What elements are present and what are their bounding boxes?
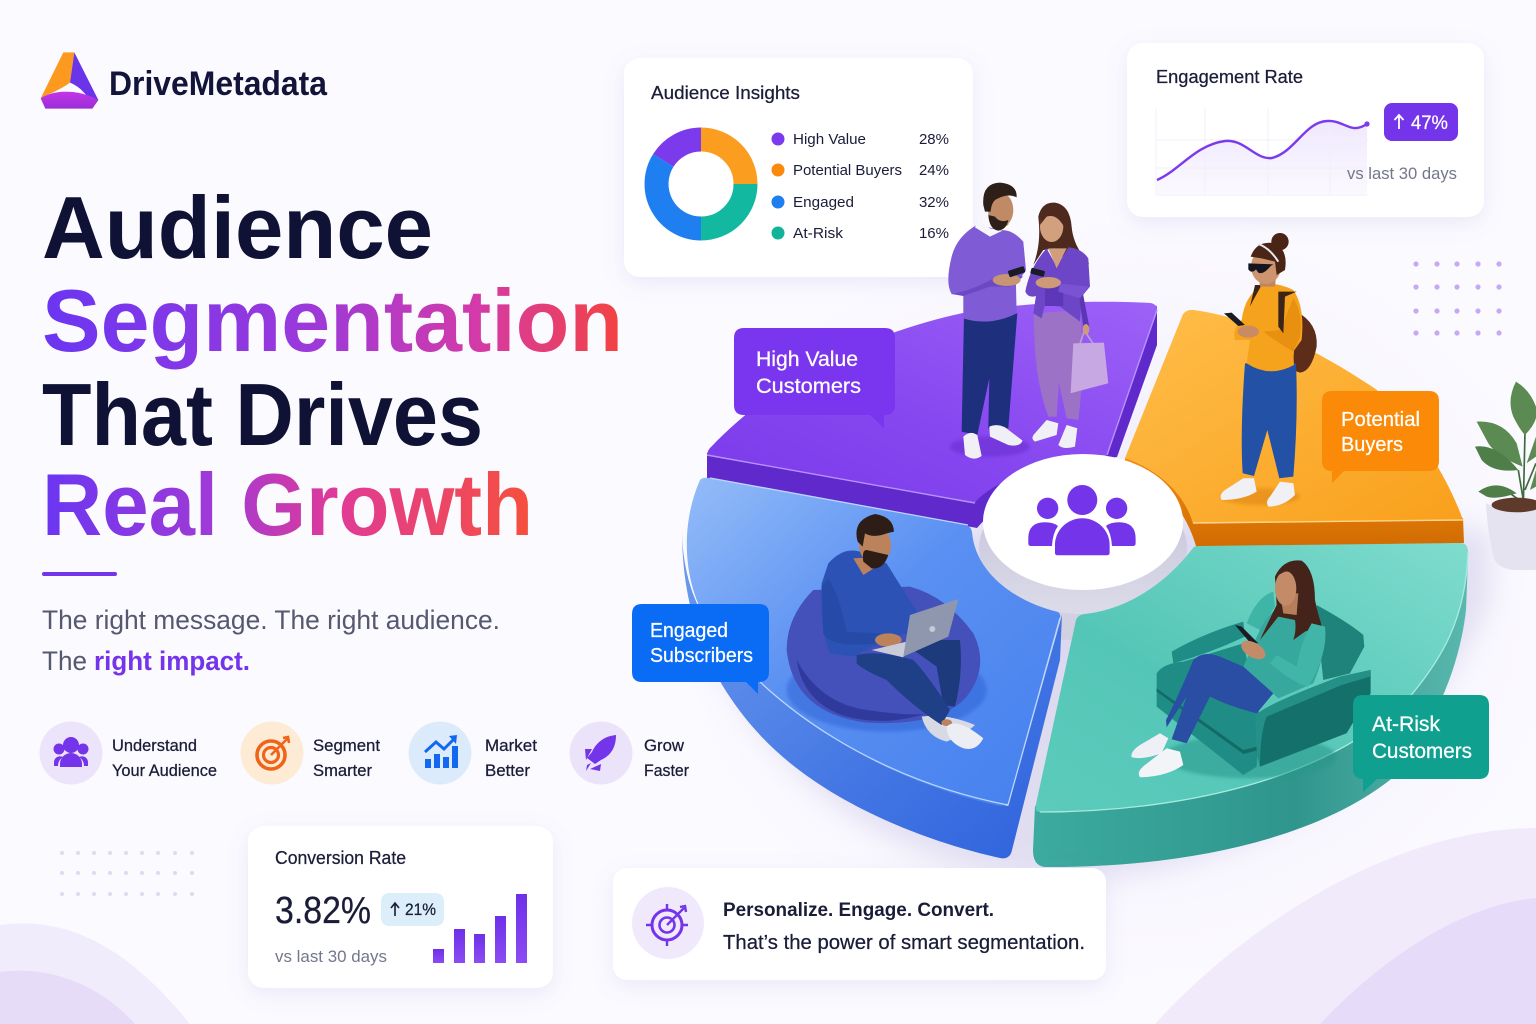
subtitle (42, 605, 500, 676)
panel: conversion rate (248, 826, 553, 988)
badge: 47% (1384, 103, 1458, 141)
panel: engagement rate: Engagement Rate (1156, 66, 1303, 87)
plant in pot (1475, 382, 1536, 570)
hub top (983, 454, 1183, 590)
feature: market better: Market (485, 737, 537, 755)
donut legend: High Value (793, 131, 866, 148)
subtitle: The (42, 646, 87, 676)
hub base (979, 482, 1187, 640)
donut legend: 28% (919, 131, 949, 148)
donut legend: 16% (919, 225, 949, 242)
callout: potential buyers: Potential (1341, 408, 1420, 431)
feature: segment smarter: Segment (313, 737, 380, 755)
slice: potential buyers orange (1125, 310, 1464, 550)
panel: conversion rate: 3.82% (275, 890, 371, 932)
callout: high value customers (734, 328, 895, 428)
decorative dots left (60, 851, 194, 896)
main title: Real Growth (42, 455, 533, 554)
panel: engagement rate: vs last 30 days (1347, 165, 1457, 183)
subtitle: right impact. (94, 646, 250, 676)
callout: high value customers: High Value (756, 348, 858, 371)
logo mark (41, 52, 98, 109)
feature: understand your audience: Understand (112, 737, 197, 755)
panel: audience insights (624, 58, 973, 277)
sneakers (1131, 733, 1168, 758)
donut legend (772, 131, 949, 242)
feature: understand your audience: Your Audience (112, 762, 217, 780)
panel: engagement rate (1127, 43, 1484, 217)
subtitle: The right message. The right audience. (42, 605, 500, 635)
panel: conversion rate: vs last 30 days (275, 948, 387, 966)
panel: conversion rate: Conversion Rate (275, 848, 406, 868)
pie shadow (700, 520, 1490, 878)
callout: at-risk customers: Customers (1372, 740, 1472, 763)
main title (42, 178, 623, 554)
callout: high value customers: Customers (756, 375, 861, 398)
panel: personalize message: That’s the power of smart segmentation. (723, 932, 1085, 954)
logo (41, 52, 328, 109)
callout: at-risk customers: At-Risk (1372, 713, 1440, 736)
person: standing woman with bag (1025, 203, 1108, 448)
slice: high value purple (707, 302, 1157, 528)
person: woman on armchair (1131, 560, 1371, 778)
feature: segment smarter (240, 722, 380, 784)
feature: segment smarter: Smarter (313, 762, 372, 780)
feature: market better (408, 722, 537, 784)
donut legend: At-Risk (793, 225, 844, 242)
feature: understand your audience (40, 722, 217, 784)
callout: potential buyers: Buyers (1341, 433, 1403, 456)
tablet and hands (1235, 625, 1258, 643)
badge: 21%: 21% (405, 900, 436, 919)
feature: grow faster: Faster (644, 762, 689, 780)
badge: 47%: 47% (1411, 113, 1448, 134)
person: standing man (948, 183, 1030, 459)
callout: engaged subscribers: Subscribers (650, 645, 753, 667)
panel: audience insights: Audience Insights (651, 82, 800, 103)
panel: personalize message (613, 868, 1106, 980)
armchair (1157, 592, 1371, 778)
icon: audience group (1028, 485, 1136, 555)
jeans (1166, 654, 1273, 743)
feature: market better: Better (485, 762, 531, 780)
person: standing woman with backpack (1220, 233, 1317, 507)
sweater and hair (1243, 610, 1324, 698)
icon: target (632, 887, 704, 959)
accent divider (42, 572, 117, 576)
donut legend: Engaged (793, 194, 854, 211)
callout: engaged subscribers: Engaged (650, 620, 728, 642)
donut chart (657, 140, 746, 228)
3D segmented pie (682, 302, 1468, 867)
callout: at-risk customers (1353, 695, 1489, 792)
main title: Audience (42, 178, 433, 277)
feature: grow faster (570, 722, 689, 784)
main title: Segmentation (42, 271, 623, 370)
feature: grow faster: Grow (644, 737, 684, 755)
line chart (1156, 108, 1370, 195)
callout: engaged subscribers (632, 604, 769, 694)
logo wordmark: DriveMetadata (109, 65, 328, 103)
donut legend: Potential Buyers (793, 162, 902, 179)
slice: at-risk teal (1033, 543, 1468, 867)
badge: 21% (381, 893, 444, 926)
bar chart (433, 894, 527, 963)
main title: That Drives (42, 365, 483, 464)
person: man on beanbag (787, 514, 987, 749)
slice: engaged blue (682, 478, 1062, 858)
decorative dots right (1413, 261, 1502, 336)
donut legend: 32% (919, 194, 949, 211)
panel: personalize message: Personalize. Engage. Convert. (723, 899, 994, 921)
donut legend: 24% (919, 162, 949, 179)
callout: potential buyers (1322, 391, 1439, 483)
